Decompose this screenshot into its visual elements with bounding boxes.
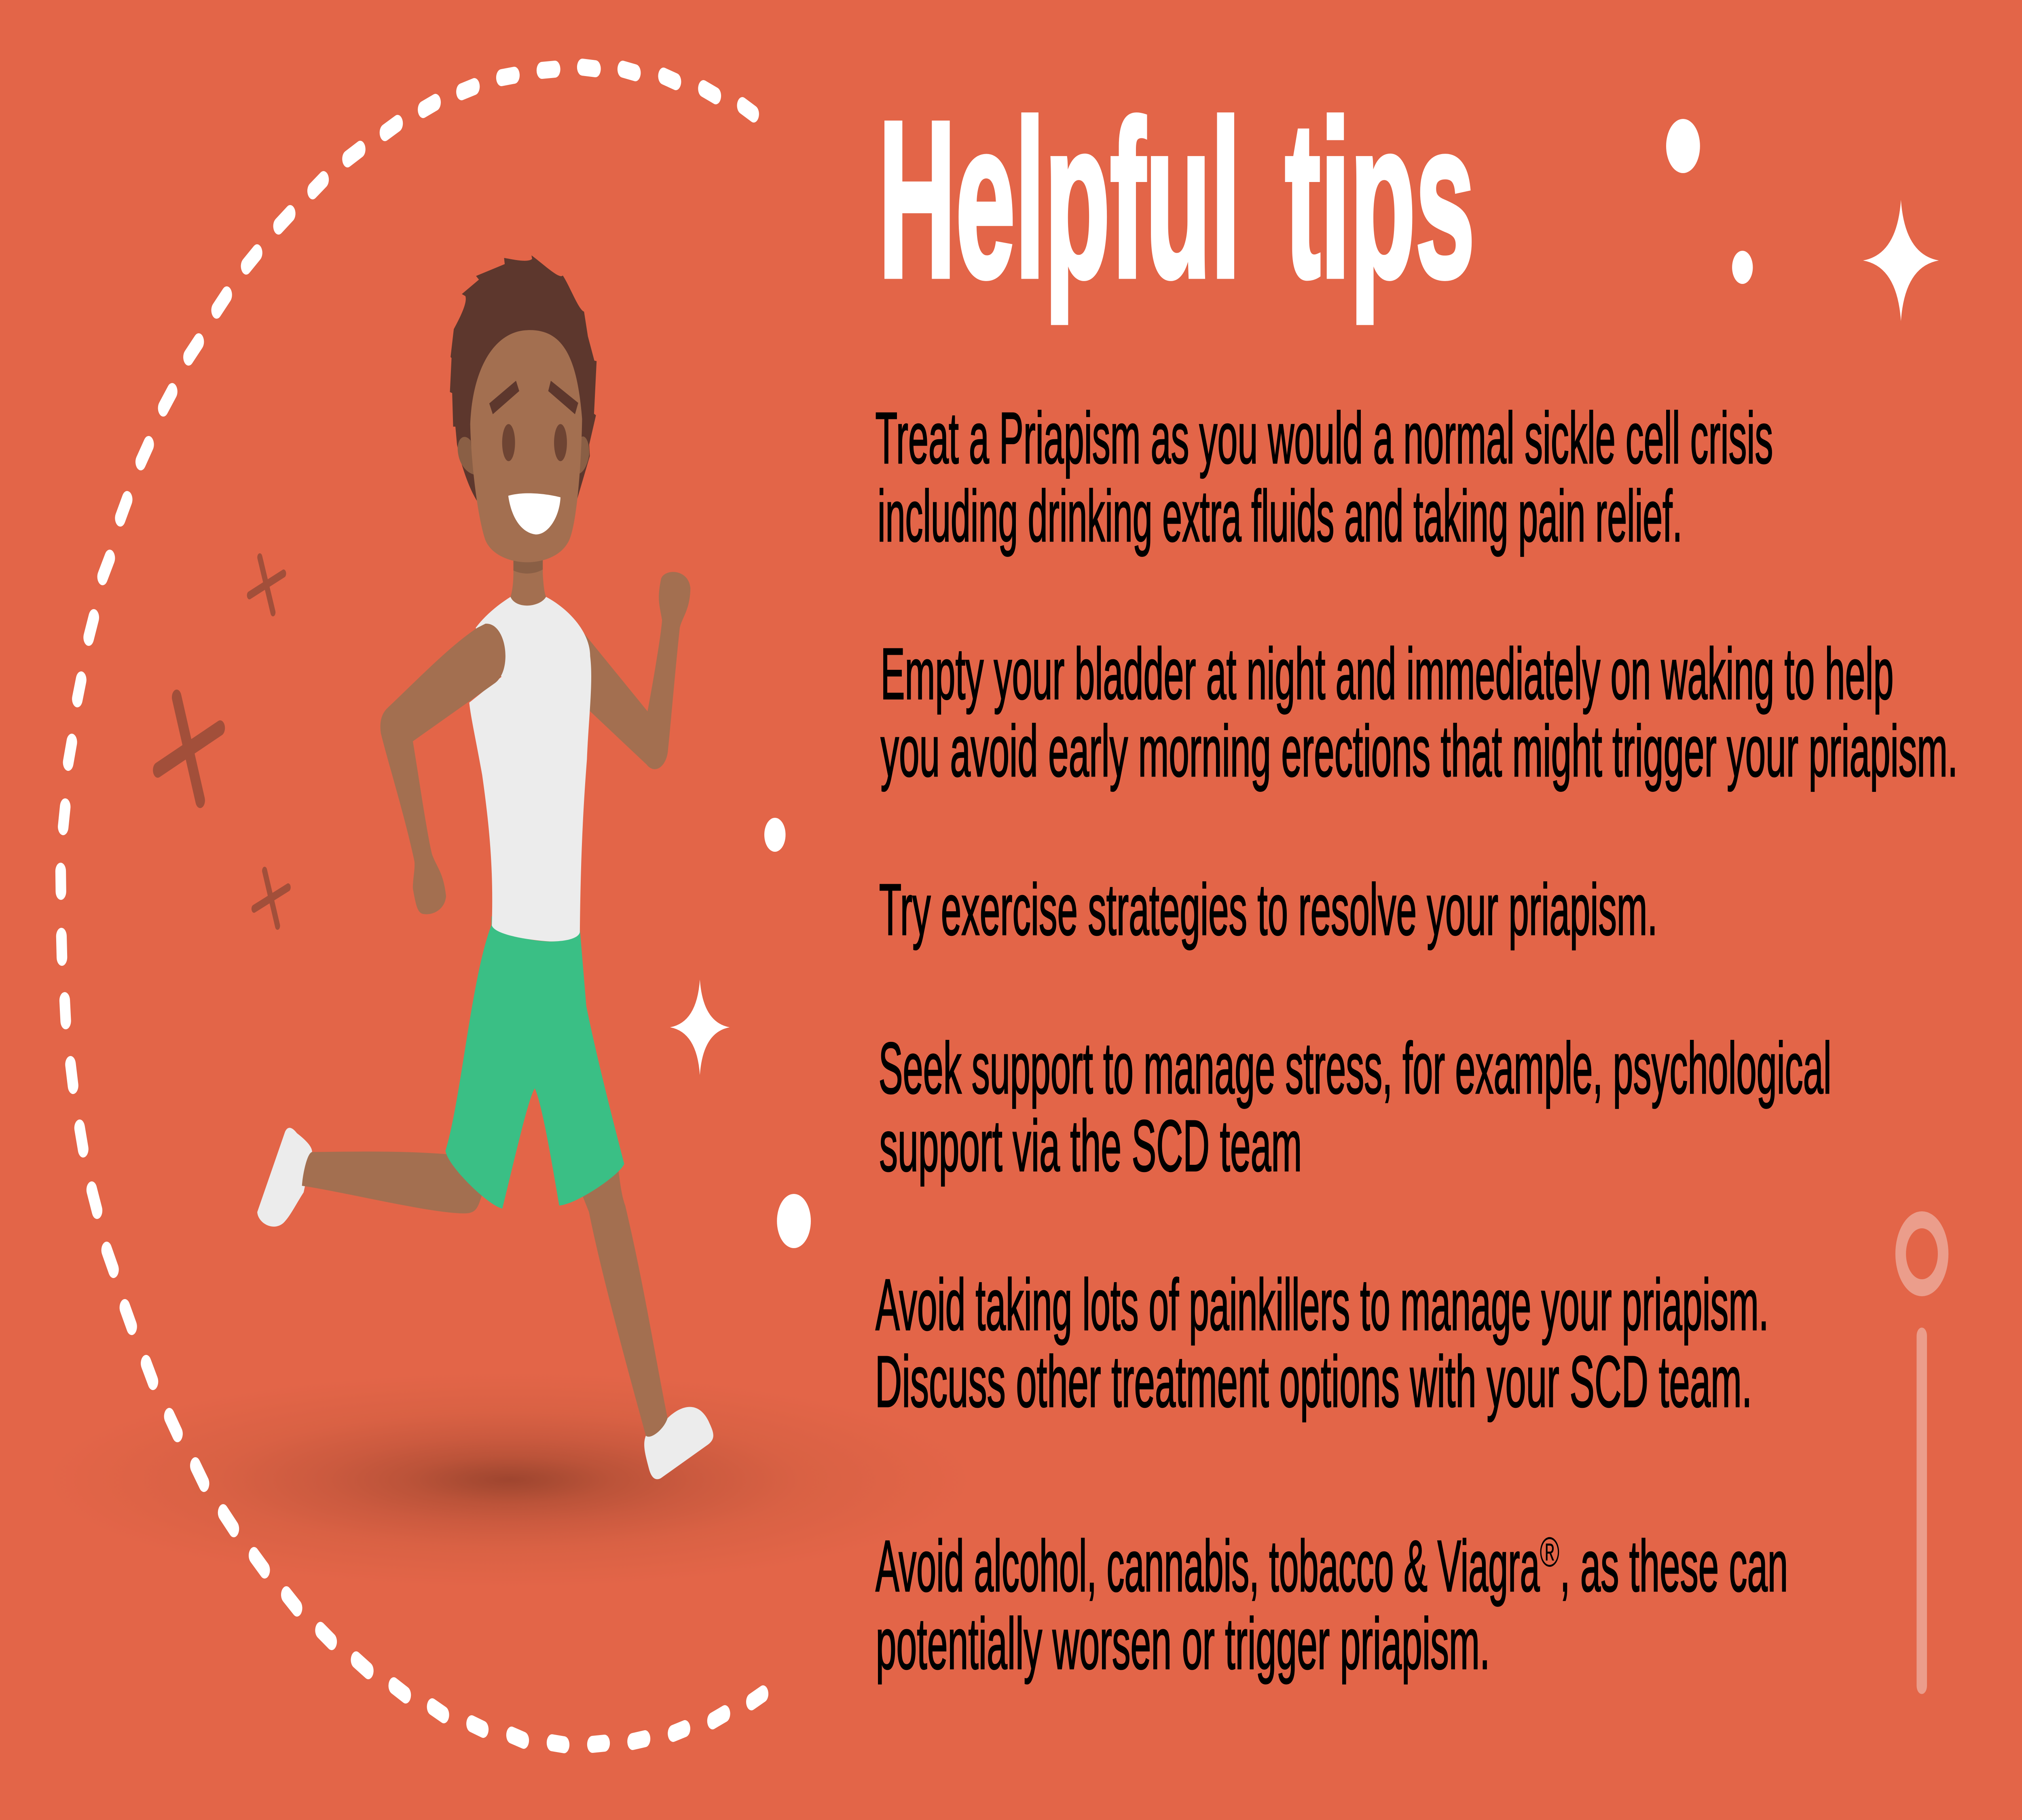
icon: sparkle near shorts [670, 980, 730, 1075]
shorts [446, 916, 624, 1208]
eyebrows [489, 381, 578, 414]
tip 2 [881, 633, 1958, 792]
icon: dot near foot [777, 1194, 811, 1248]
icon: small cross top [250, 557, 283, 612]
eyes [502, 424, 567, 461]
rear arm [584, 572, 690, 769]
icon: top sparkle [1863, 200, 1939, 321]
ears [458, 436, 589, 474]
dashed ring, upper part [61, 67, 754, 891]
right shoe [644, 1407, 713, 1479]
tip 6 [876, 1526, 1788, 1685]
legs, shoes and shorts [257, 916, 713, 1479]
shirt [469, 597, 591, 942]
decorative ring and bar [1901, 1220, 1943, 1686]
tip 4 [878, 1028, 1832, 1187]
ground shadow [47, 1373, 972, 1587]
tip 1 [875, 398, 1773, 557]
back leg [302, 1151, 482, 1213]
neck shadow [514, 558, 543, 574]
icon: top dot large [1666, 119, 1700, 173]
smile [508, 493, 560, 534]
tip 6: ® [1540, 1528, 1559, 1576]
front leg [583, 1170, 668, 1437]
dashed ring, lower part [61, 936, 763, 1745]
icon: dot near arm [764, 818, 785, 852]
front arm [381, 624, 506, 914]
icon: small cross bottom [254, 871, 288, 926]
hair [450, 255, 596, 502]
icon: large cross [158, 697, 220, 800]
face [470, 330, 582, 562]
left shoe [257, 1128, 312, 1227]
upper body and head [381, 255, 690, 942]
neck [510, 558, 546, 605]
runner figure [257, 255, 713, 1479]
title [878, 75, 1475, 325]
icon: top dot small [1732, 251, 1753, 284]
tip 5 [875, 1264, 1769, 1422]
